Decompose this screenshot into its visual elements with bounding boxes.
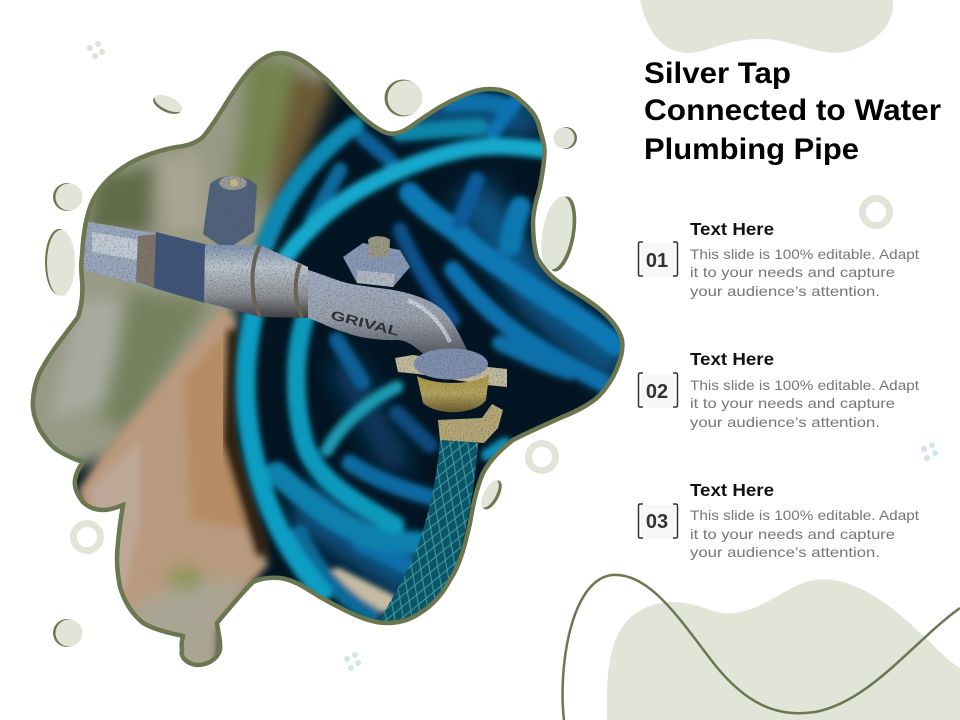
title: Connected to Water: [644, 94, 941, 127]
item 03: [638, 480, 919, 560]
decorative rings: [74, 198, 890, 550]
tap body: [84, 176, 507, 443]
item description: your audience’s attention.: [690, 283, 880, 299]
item description: it to your needs and capture: [690, 526, 895, 542]
decorative dots: blue bottom: [344, 652, 361, 671]
tan stone: [78, 308, 268, 670]
photo frame outline: [33, 53, 622, 665]
item description: [690, 507, 919, 560]
hose with net: [378, 440, 478, 622]
title: [644, 57, 941, 166]
wing coupling: [395, 355, 507, 387]
valve cap: [203, 176, 257, 250]
dark coupling: [154, 232, 208, 303]
item description: [690, 246, 919, 299]
item description: This slide is 100% editable. Adapt: [690, 246, 919, 262]
hex nut: [343, 243, 410, 287]
item description: it to your needs and capture: [690, 395, 895, 411]
decorative blob: top right: [640, 0, 893, 53]
item heading: Text Here: [690, 480, 774, 500]
number badge 01: 01: [646, 250, 668, 272]
decorative pebbles: [45, 80, 581, 647]
item description: This slide is 100% editable. Adapt: [690, 377, 919, 393]
decorative blob: bottom right: [607, 579, 960, 720]
item description: [690, 377, 919, 430]
photo: tap and hoses inside blob frame: [35, 55, 620, 663]
item 02: [638, 349, 919, 430]
hose clamp: [438, 404, 503, 443]
rust band: [136, 234, 158, 288]
item description: This slide is 100% editable. Adapt: [690, 507, 919, 523]
item description: it to your needs and capture: [690, 264, 895, 280]
threaded body: [204, 245, 308, 318]
decorative dots: grey: [87, 41, 105, 59]
decorative dots: blue right: [921, 442, 938, 461]
number badge 03: [638, 504, 678, 539]
number badge 01: [638, 242, 678, 277]
item description: your audience’s attention.: [690, 414, 880, 430]
spout: [308, 270, 468, 358]
item description: your audience’s attention.: [690, 544, 880, 560]
item heading: Text Here: [690, 219, 774, 239]
blurred teal hoses: [246, 100, 615, 615]
number badge 03: 03: [646, 511, 668, 533]
title: Silver Tap: [644, 57, 791, 90]
item heading: Text Here: [690, 349, 774, 369]
inlet pipe: [84, 221, 160, 289]
decorative wave line: [563, 575, 960, 720]
title: Plumbing Pipe: [644, 133, 859, 166]
item 01: [638, 219, 919, 299]
brand mark: GRIVAL: [329, 307, 401, 339]
number badge 02: [638, 373, 678, 408]
shadow beside stone: [230, 330, 264, 555]
number badge 02: 02: [646, 381, 668, 403]
mossy wall background: [20, 40, 340, 480]
blue haze behind hoses: [300, 110, 620, 580]
top pin: [368, 236, 390, 257]
